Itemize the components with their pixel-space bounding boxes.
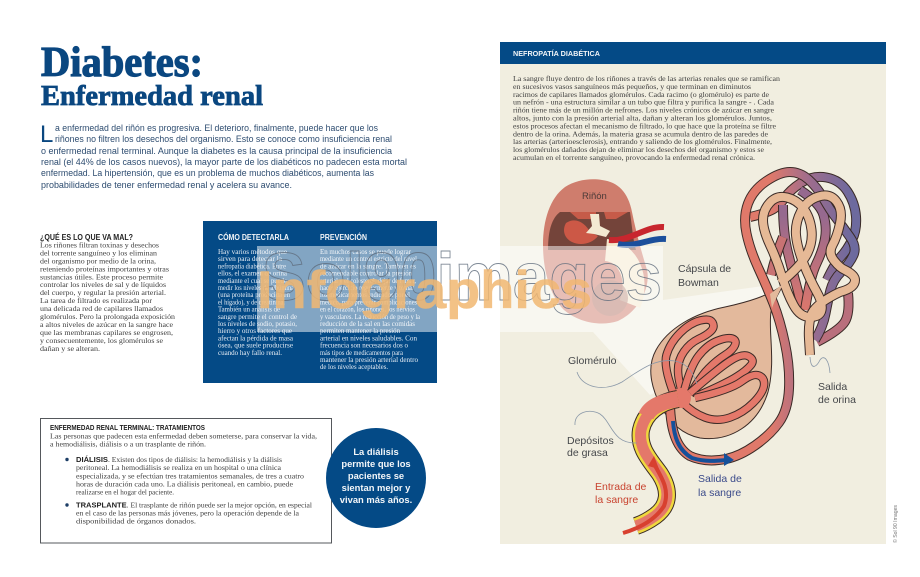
- illustration: glomerulus loops: [666, 320, 764, 420]
- callout: circle: La diálisis: [353, 446, 399, 457]
- title: Enfermedad renal: [41, 81, 263, 112]
- text column: prevención: permiten mantener la presión: [320, 326, 400, 335]
- text column: cómo detectarla: Hay varios métodos que: [218, 247, 288, 256]
- callout: circle: permite que los: [341, 458, 411, 469]
- text column: prevención: reducción de la sal en las comidas: [320, 319, 415, 328]
- bullet: diálisis: peritoneal. La hemodiálisis se realiza en un hospital o una clínica: [76, 463, 282, 472]
- title: Diabetes:: [41, 40, 203, 86]
- text block: qué es lo que va mal: del organismo por medio de la orina,: [40, 256, 156, 265]
- text block: nefropatía: un nefrón - una estructura similar a un tubo que filtra y purifica la sangre - . Cada: [513, 98, 775, 107]
- text column: cómo detectarla: nefropatía diabética. Entre: [218, 261, 287, 270]
- labels: diagram: de orina: [818, 394, 856, 406]
- text column: cómo detectarla: mediante el cual se puede: [218, 276, 288, 285]
- intro paragraph: probabilidades de tener enfermedad renal y acelera su avance.: [41, 180, 292, 191]
- text block: nefropatía: altos, junto con la presión arterial alta, dañan y alteran los glomérulos. Juntos,: [513, 114, 772, 122]
- text column: cómo detectarla: cuando hay fallo renal.: [218, 348, 282, 357]
- text column: prevención: médico, para prevenir complicaciones: [320, 297, 417, 306]
- bullet: diálisis: horas de duración cada uno. La diálisis peritoneal, en cambio, puede: [76, 480, 294, 488]
- tubule: [763, 195, 855, 355]
- labels: diagram: Entrada de: [595, 481, 647, 493]
- labels: diagram: de grasa: [567, 447, 608, 459]
- bullet: diálisis: especializada, y se efectúan tres tratamientos semanales, de tres a cuatro: [76, 472, 304, 480]
- intro paragraph: [40, 121, 407, 191]
- callout: circle: pacientes se: [348, 470, 404, 481]
- veil: watermark band: [257, 246, 770, 395]
- arrow: salida de la sangre: [673, 421, 734, 466]
- text block: nefropatía: estos procesos afectan el mecanismo de filtrado, lo que hace que la proteína se filtre: [513, 121, 777, 130]
- text block: qué es lo que va mal: dañan y se alteran.: [40, 344, 100, 353]
- text column: prevención: los medicamentos indicados por el: [320, 290, 410, 299]
- credit: © Sol 90 Images: [892, 504, 899, 543]
- tratamientos intro: [50, 432, 317, 448]
- illustration: blood vessels and tubule: [670, 172, 856, 460]
- text column: prevención: hacer ejercicio regularmente y tomar: [320, 283, 414, 292]
- text block: qué es lo que va mal: ¿QUÉ ES LO QUE VA MAL?: [40, 233, 133, 242]
- callout: circle: vivan más años.: [340, 494, 412, 505]
- text column: cómo detectarla: el hígado), y de creatinina.: [218, 297, 285, 306]
- intro paragraph: L: [40, 121, 53, 148]
- callout: circle: sientan mejor y: [342, 482, 411, 493]
- labels: diagram: la sangre: [595, 494, 638, 506]
- text block: nefropatía: racimos de capilares llamados glomérulos. Cada racimo (o glomérulo) es parte de: [513, 90, 770, 99]
- text column: prevención: En muchos casos se puede lograr: [320, 247, 411, 256]
- panel: detection and prevention: [203, 221, 437, 383]
- text column: prevención: mantener la presión arterial dentro: [320, 355, 418, 364]
- text column: cómo detectarla: sangre permite el control de: [218, 312, 298, 321]
- text block: nefropatía: en sucesivos vasos sanguíneos más pequeños, y que terminan en diminutos: [513, 82, 751, 91]
- heading: nefropatía: NEFROPATÍA DIABÉTICA: [513, 49, 600, 58]
- text column: prevención: más tipos de medicamentos para: [320, 348, 404, 357]
- labels: diagram: [567, 263, 856, 506]
- text column: prevención: de los niveles aceptables.: [320, 362, 388, 371]
- text block: qué es lo que va mal: a altos niveles de azúcar en la sangre hace: [40, 320, 174, 329]
- labels: diagram: Cápsula de: [678, 263, 731, 275]
- labels: diagram: Depósitos: [567, 435, 614, 447]
- illustration: bowman capsule: [651, 285, 783, 439]
- labels: diagram: Bowman: [678, 277, 719, 289]
- text block: qué es lo que va mal: La tarea de filtrado es realizada por: [40, 296, 153, 305]
- text column: prevención: frecuencia son necesarios dos o: [320, 341, 408, 350]
- text column: cómo detectarla: También un análisis de: [218, 305, 281, 314]
- text column: cómo detectarla: sirven para detectar la: [218, 254, 283, 263]
- bullet: diálisis: DIÁLISIS. Existen dos tipos de diálisis: la hemodiálisis y la diálisis: [76, 455, 282, 464]
- text block: qué es lo que va mal: controlar los niveles de sal y de líquidos: [40, 280, 166, 289]
- callout: circle: [326, 428, 426, 528]
- labels: diagram: Salida de: [698, 473, 742, 485]
- text block: qué es lo que va mal: que las membranas capilares se engrosen,: [40, 328, 173, 337]
- bullet: trasplante: disponibilidad de órganos donados.: [76, 516, 196, 526]
- bullet: diálisis: [65, 455, 304, 496]
- text column: prevención: recomendable controlar la presión: [320, 269, 412, 278]
- heading: prevención: PREVENCIÓN: [320, 233, 367, 242]
- efferent vessel: [670, 172, 855, 460]
- heading: cómo detectarla: CÓMO DETECTARLA: [218, 233, 289, 242]
- bullet: trasplante: TRASPLANTE. El trasplante de riñón puede ser la mejor opción, en especial: [76, 500, 312, 510]
- text block: nefropatía: [513, 74, 780, 162]
- text block: nefropatía: acumulan en el torrente sanguíneo, provocando la enfermedad renal crónica.: [513, 153, 755, 162]
- text block: qué es lo que va mal: glomérulos. Pero la prolongada exposición: [40, 312, 175, 321]
- bullet: trasplante: [65, 500, 312, 526]
- text block: nefropatía: riñón tiene más de un millón de nefrones. Los niveles crónicos de azúcar en sangre: [513, 106, 775, 115]
- watermark text: Infographics: [257, 261, 592, 320]
- text column: cómo detectarla: medir los niveles de albúmina: [218, 283, 295, 292]
- text column: cómo detectarla: afectan la pérdida de masa: [218, 333, 294, 342]
- text column: prevención: mediante un control estricto del nivel: [320, 254, 417, 263]
- text column: cómo detectarla: (una proteína producida en: [218, 290, 290, 299]
- watermark text: Sol90images: [262, 239, 662, 315]
- text block: qué es lo que va mal: Los riñones filtran toxinas y desechos: [40, 240, 159, 250]
- text column: cómo detectarla: ellos, el examen de orina: [218, 269, 288, 278]
- leader lines: [575, 357, 830, 443]
- tratamientos intro: Las personas que padecen esta enfermedad deben someterse, para conservar la vida,: [50, 432, 317, 440]
- text column: cómo detectarla: [218, 247, 298, 357]
- illustration: afferent arteriole: [623, 399, 678, 533]
- panel: nefropatía diabética: [500, 42, 886, 544]
- illustration: kidney: [543, 179, 666, 324]
- intro paragraph: o enfermedad renal terminal. Aunque la diabetes es la causa principal de la insuficiencia: [41, 146, 393, 157]
- bullet: diálisis: realizarse en el hogar del paciente.: [76, 488, 174, 496]
- heading: tratamientos: ENFERMEDAD RENAL TERMINAL: TRATAMIENTOS: [50, 423, 205, 432]
- text column: cómo detectarla: hierro y otros factores que: [218, 326, 293, 335]
- intro paragraph: a enfermedad del riñón es progresiva. El deterioro, finalmente, puede hacer que los: [55, 123, 378, 134]
- arrow: entrada: [648, 456, 659, 469]
- text column: prevención: arterial en niveles saludables. Con: [320, 333, 417, 342]
- text column: prevención: de azúcar en la sangre. También es: [320, 261, 416, 270]
- text block: qué es lo que va mal: reteniendo proteínas importantes y otras: [40, 264, 169, 273]
- text block: nefropatía: dentro de la orina. Además, la materia grasa se acumula dentro de las paredes de: [513, 129, 769, 138]
- vessel strands: [750, 177, 856, 342]
- panel: tratamientos: [40, 418, 332, 543]
- text column: cómo detectarla: ósea, que suele producirse: [218, 341, 294, 350]
- text block: qué es lo que va mal: del cuerpo, y regular la presión arterial.: [40, 288, 166, 297]
- text column: prevención: en el corazón, los riñones, los nervios: [320, 305, 415, 314]
- text block: qué es lo que va mal: una delicada red de capilares llamados: [40, 304, 163, 313]
- tratamientos intro: a hemodiálisis, diálisis o a un trasplante de riñón.: [50, 440, 206, 448]
- text column: prevención: arterial y el colesterol, dejar de fumar,: [320, 276, 416, 285]
- text column: cómo detectarla: los niveles de sodio, potasio,: [218, 319, 297, 328]
- bullet: trasplante: en el caso de las personas más jóvenes, pero la operación depende de la: [76, 508, 300, 518]
- labels: diagram: Salida: [818, 381, 847, 393]
- intro paragraph: riñones no filtren los desechos del organismo. Esto se conoce como insuficiencia renal: [55, 134, 392, 145]
- text column: prevención: [320, 247, 421, 371]
- label: riñón: Riñón: [582, 191, 607, 202]
- text column: prevención: y vasculares. La reducción de peso y la: [320, 312, 421, 321]
- title: [41, 40, 263, 112]
- labels: diagram: Glomérulo: [568, 355, 617, 367]
- intro paragraph: renal (el 44% de los casos nuevos), la mayor parte de los diabéticos no padecen esta mortal: [41, 157, 407, 168]
- text block: nefropatía: las arterias (arterioesclerosis), entrando y saliendo de los glomérulos. Finalmente,: [513, 137, 772, 146]
- text block: qué es lo que va mal: [40, 233, 175, 353]
- text block: qué es lo que va mal: y consecuentemente, los glomérulos se: [40, 336, 164, 345]
- intro paragraph: enfermedad. La hipertensión, que es un problema de muchos diabéticos, aumenta las: [41, 168, 374, 179]
- text block: nefropatía: los glomérulos dañados dejan de eliminar los desechos del organismo y estos se: [513, 145, 765, 154]
- text block: qué es lo que va mal: sustancias útiles. Este proceso permite: [40, 272, 164, 281]
- text block: nefropatía: La sangre fluye dentro de los riñones a través de las arterias renales que se ramifican: [513, 74, 780, 83]
- text block: qué es lo que va mal: del torrente sanguíneo y los eliminan: [40, 248, 157, 257]
- labels: diagram: la sangre: [698, 487, 741, 499]
